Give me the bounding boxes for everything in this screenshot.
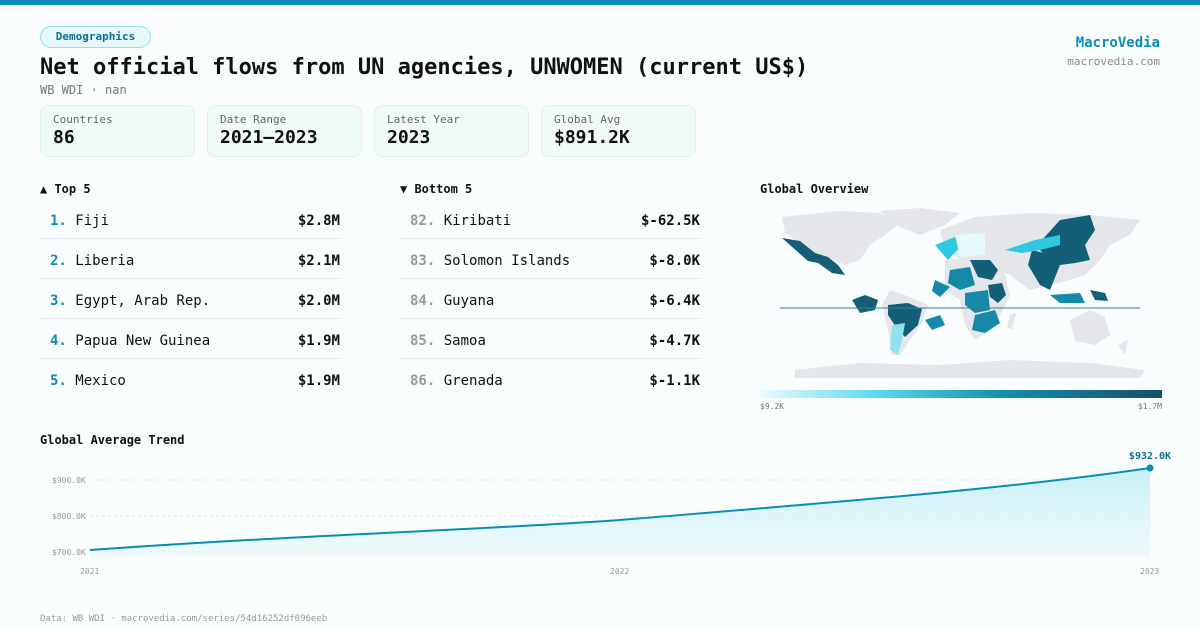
text: Global Avg bbox=[554, 113, 620, 126]
panel: bottom 5: ▼ Bottom 5 bbox=[400, 182, 472, 196]
panel: bottom 5: $-8.0K bbox=[649, 253, 700, 269]
footer: Data: WB WDI · macrovedia.com/series/54d16252df096eeb bbox=[40, 614, 327, 624]
stat cards: 86 bbox=[53, 127, 75, 148]
line chart: $800.0K bbox=[52, 512, 86, 521]
heading: global average trend: Global Average Trend bbox=[40, 433, 184, 447]
panel: top 5: $1.9M bbox=[298, 333, 340, 349]
line chart bbox=[52, 451, 1171, 576]
tag: Demographics: Demographics bbox=[56, 30, 135, 43]
text: Date Range bbox=[220, 113, 286, 126]
panel: bottom 5: $-4.7K bbox=[649, 333, 700, 349]
panel: global overview map: $1.7M bbox=[1138, 402, 1162, 411]
legend gradient bbox=[760, 390, 1162, 398]
subtitle: WB WDI · nan bbox=[40, 83, 127, 97]
panel: top 5: ▲ Top 5 bbox=[40, 182, 91, 196]
text: 2023 bbox=[387, 127, 430, 148]
title: Net official flows from UN agencies, UNWOMEN (current US$) bbox=[40, 55, 808, 80]
brand: MacroVedia bbox=[1076, 35, 1160, 51]
panel: top 5: 1. Fiji bbox=[50, 213, 109, 229]
panel: bottom 5: 84. Guyana bbox=[410, 293, 494, 309]
map bbox=[780, 208, 1145, 378]
panel: global overview map: $9.2K bbox=[760, 402, 784, 411]
panel: top 5: $2.8M bbox=[298, 213, 340, 229]
text: Latest Year bbox=[387, 113, 460, 126]
panel: top 5: $1.9M bbox=[298, 373, 340, 389]
text: $891.2K bbox=[554, 127, 630, 148]
line chart: 2023 bbox=[1140, 567, 1159, 576]
panel: bottom 5: $-62.5K bbox=[641, 213, 700, 229]
panel: global overview map bbox=[760, 182, 1162, 411]
panel: top 5: 5. Mexico bbox=[50, 373, 126, 389]
panel: global overview map: Global Overview bbox=[760, 182, 868, 196]
line chart: 2022 bbox=[610, 567, 629, 576]
text: 2021–2023 bbox=[220, 127, 318, 148]
panel: bottom 5: 86. Grenada bbox=[410, 373, 503, 389]
panel: top 5: $2.0M bbox=[298, 293, 340, 309]
panel: bottom 5: 83. Solomon Islands bbox=[410, 253, 570, 269]
line chart: $700.0K bbox=[52, 548, 86, 557]
panel: top 5: 2. Liberia bbox=[50, 253, 134, 269]
panel: bottom 5: 85. Samoa bbox=[410, 333, 486, 349]
panel: top 5 bbox=[40, 182, 340, 389]
tag: Demographics bbox=[40, 26, 151, 48]
brand bbox=[1067, 35, 1160, 68]
panel: bottom 5: $-1.1K bbox=[649, 373, 700, 389]
top bar bbox=[0, 0, 1200, 5]
line chart: $932.0K bbox=[1129, 451, 1171, 462]
panel: bottom 5: 82. Kiribati bbox=[410, 213, 511, 229]
stat cards: Countries bbox=[53, 113, 113, 126]
panel: top 5: 4. Papua New Guinea bbox=[50, 333, 210, 349]
panel: top 5: $2.1M bbox=[298, 253, 340, 269]
panel: bottom 5 bbox=[400, 182, 700, 389]
panel: bottom 5: $-6.4K bbox=[649, 293, 700, 309]
line chart: 2021 bbox=[80, 567, 99, 576]
line chart: $900.0K bbox=[52, 476, 86, 485]
brand: macrovedia.com bbox=[1067, 55, 1160, 68]
stat cards bbox=[40, 105, 195, 157]
panel: top 5: 3. Egypt, Arab Rep. bbox=[50, 293, 210, 309]
